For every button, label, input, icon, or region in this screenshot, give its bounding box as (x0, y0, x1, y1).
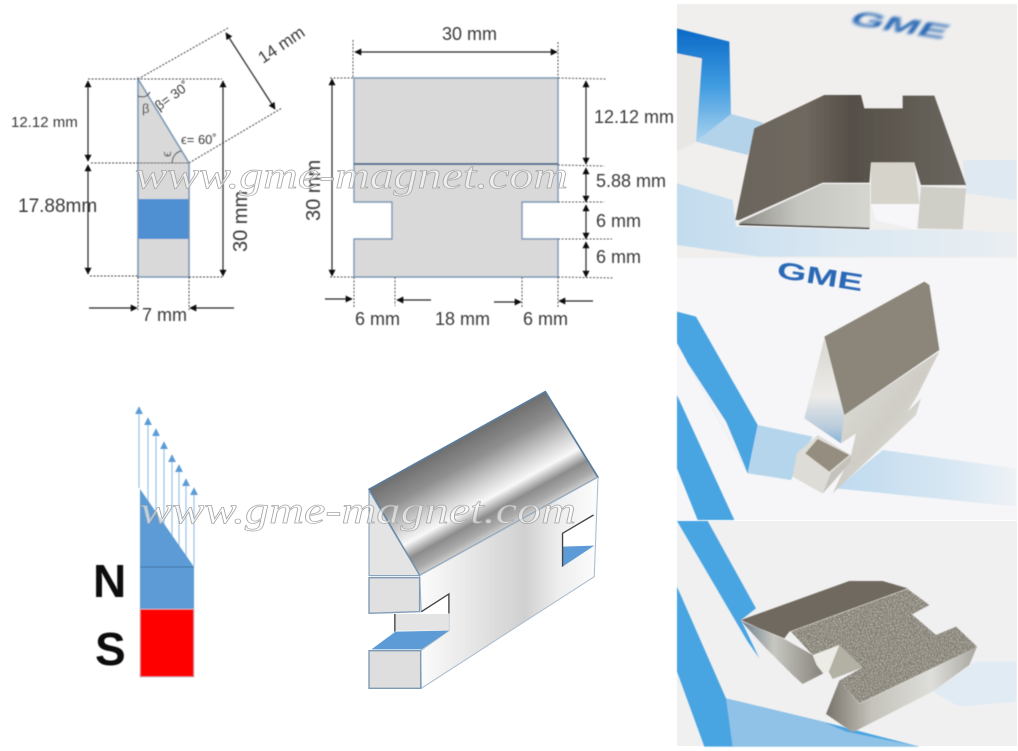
side profile labels: 7 mm (142, 305, 187, 325)
side profile labels (11, 23, 308, 325)
slot edges (395, 594, 449, 632)
photo 3 background (677, 521, 1017, 746)
side profile dimension lines (88, 28, 282, 310)
front view labels: 18 mm (435, 309, 490, 329)
side profile labels: 14 mm (255, 23, 308, 67)
magnetisation diagram (93, 407, 194, 677)
front view labels: 30 mm (303, 160, 325, 221)
side profile labels: 12.12 mm (11, 114, 78, 131)
side profile labels: ϵ= 60˚ (181, 132, 217, 147)
front view labels (303, 24, 674, 329)
side profile labels: β (142, 101, 149, 116)
magnet 3 (741, 581, 977, 732)
side face (420, 477, 598, 688)
end triangle (369, 491, 420, 576)
photo 2 logo: GME (775, 257, 865, 297)
cross-section drawing: side profile (11, 23, 308, 325)
far notch edges (563, 515, 594, 567)
south pole (140, 609, 194, 677)
far notch opening (563, 515, 594, 547)
upper block (369, 578, 420, 613)
side profile shape (138, 79, 189, 277)
photo 3 artwork (677, 521, 1016, 747)
photo 1 logo: GME (845, 7, 955, 43)
front view shape (354, 78, 558, 277)
front view labels: 6 mm (523, 309, 568, 329)
front view labels: 5.88 mm (596, 171, 666, 191)
pole divider (140, 566, 194, 568)
slot inner wall (395, 614, 449, 631)
isometric magnet illustration (369, 392, 598, 688)
photo 2 artwork (677, 257, 1016, 520)
product photo 2 (677, 257, 1017, 520)
front view labels: 12.12 mm (594, 107, 674, 127)
side profile labels: ϵ (159, 151, 174, 157)
lower block (369, 651, 421, 688)
product photo 1 (677, 4, 1017, 258)
product photo 3 (677, 521, 1017, 747)
watermark upper: www.gme-magnet.com (135, 155, 568, 197)
front view labels: 6 mm (355, 309, 400, 329)
photo 2 background (677, 258, 1017, 520)
front view labels: 30 mm (442, 24, 497, 44)
far notch floor (563, 546, 594, 567)
watermark lower: www.gme-magnet.com (140, 490, 576, 532)
photo 1 artwork (677, 7, 1016, 257)
side profile labels: 17.88mm (18, 196, 97, 217)
label S: S (95, 623, 126, 675)
magnet 1 (735, 95, 966, 230)
side profile labels: 30 mm (230, 191, 252, 252)
front view labels: 6 mm (596, 247, 641, 267)
north pole (140, 489, 194, 609)
slot floor (371, 631, 449, 649)
cross-section drawing: front view (303, 24, 674, 329)
front view dimension lines (330, 40, 614, 308)
curved top face (369, 392, 598, 576)
front view labels: 6 mm (596, 211, 641, 231)
photo 1 background (677, 4, 1017, 258)
magnet 2 (793, 282, 939, 494)
label N: N (93, 555, 126, 607)
front view arrows (325, 52, 593, 302)
side profile arrows (88, 33, 275, 308)
magnetisation arrows (139, 407, 194, 566)
side profile labels: β= 30˚ (152, 78, 192, 113)
